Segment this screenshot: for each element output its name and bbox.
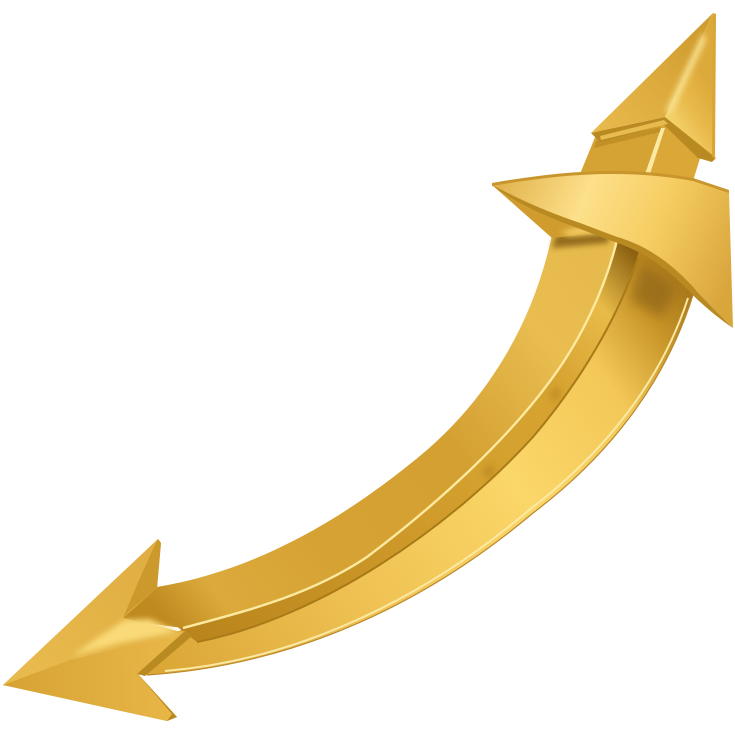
- top arrow stem: [580, 122, 702, 184]
- shaft: lower band: [125, 235, 705, 675]
- shaft: upper band: [120, 230, 620, 628]
- shaft: middle strip: [175, 232, 640, 642]
- bottom arrow head: [3, 539, 192, 721]
- top arrow head: [591, 13, 716, 162]
- middle arrow wing: [492, 171, 733, 328]
